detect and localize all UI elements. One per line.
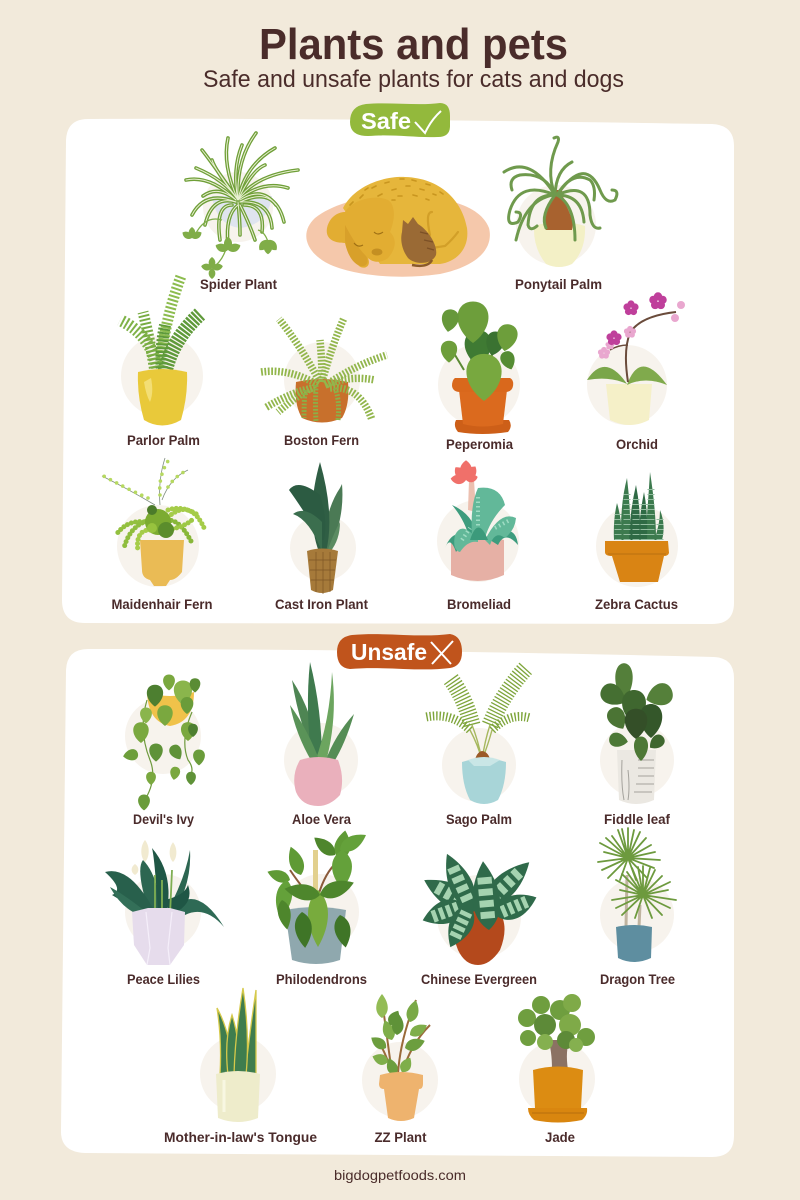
badge: unsafe: Unsafe [351,639,427,665]
plant: Peace Lilies [105,840,224,987]
plant: Spider Plant [181,133,298,292]
label: Philodendrons [276,972,367,987]
label: Mother-in-law's Tongue [164,1130,317,1145]
badge: unsafe [337,634,462,669]
label: Sago Palm [446,812,512,827]
label: Boston Fern [284,433,359,448]
plant: Ponytail Palm [504,137,617,292]
label: Parlor Palm [127,433,200,448]
plant: Devil's Ivy [122,675,205,827]
plant: Bromeliad [437,460,519,612]
label: Orchid [616,437,658,452]
plant: Philodendrons [265,829,369,987]
subtitle: Safe and unsafe plants for cats and dogs [203,66,624,93]
label: Zebra Cactus [595,597,678,612]
plant: Peperomia [438,301,520,452]
illustration: dog and cat sleeping on rug [306,177,490,277]
label: Spider Plant [200,277,277,292]
label: Fiddle leaf [604,812,670,827]
label: Peace Lilies [127,972,200,987]
label: Jade [545,1130,575,1145]
panel: safe plants [62,103,734,624]
plant: Dragon Tree [598,828,676,987]
plant: Aloe Vera [284,662,358,827]
plant: Jade [518,994,595,1145]
label: Chinese Evergreen [421,972,537,987]
plant: Zebra Cactus [595,472,678,612]
plant: Maidenhair Fern [100,458,212,612]
label: Bromeliad [447,597,511,612]
plant: Boston Fern [261,318,387,448]
plant: Cast Iron Plant [275,462,368,612]
badge: safe: Safe [361,108,411,134]
panel: unsafe plants [61,634,734,1157]
plant: Chinese Evergreen [418,849,541,987]
plant: Mother-in-law's Tongue [164,988,317,1145]
label: Aloe Vera [292,812,351,827]
label: Maidenhair Fern [112,597,212,612]
title: Plants and pets [259,20,568,69]
badge: safe [350,103,450,137]
label: Devil's Ivy [133,812,194,827]
label: Peperomia [446,437,513,452]
safe card background [62,119,734,624]
label: Cast Iron Plant [275,597,368,612]
plant: Orchid [587,292,685,452]
unsafe card background [61,649,734,1157]
label: ZZ Plant [374,1130,427,1145]
plant: Fiddle leaf [597,663,676,827]
plant: Sago Palm [426,668,530,827]
footer website: bigdogpetfoods.com [334,1167,466,1183]
plant: ZZ Plant [362,994,438,1145]
label: Ponytail Palm [515,277,602,292]
label: Dragon Tree [600,972,675,987]
plant: Parlor Palm [120,276,203,448]
